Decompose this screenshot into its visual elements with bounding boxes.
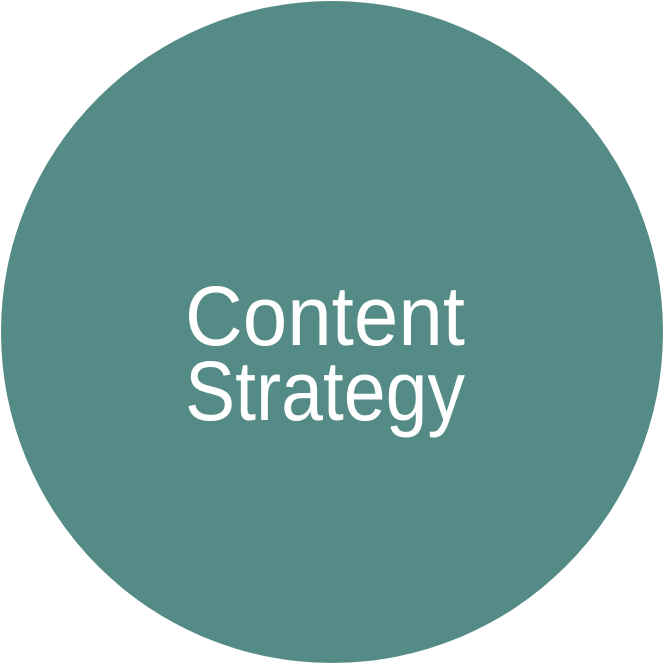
title line 1: Content	[185, 269, 465, 363]
title text	[185, 269, 465, 438]
title line 2: Strategy	[185, 344, 465, 438]
